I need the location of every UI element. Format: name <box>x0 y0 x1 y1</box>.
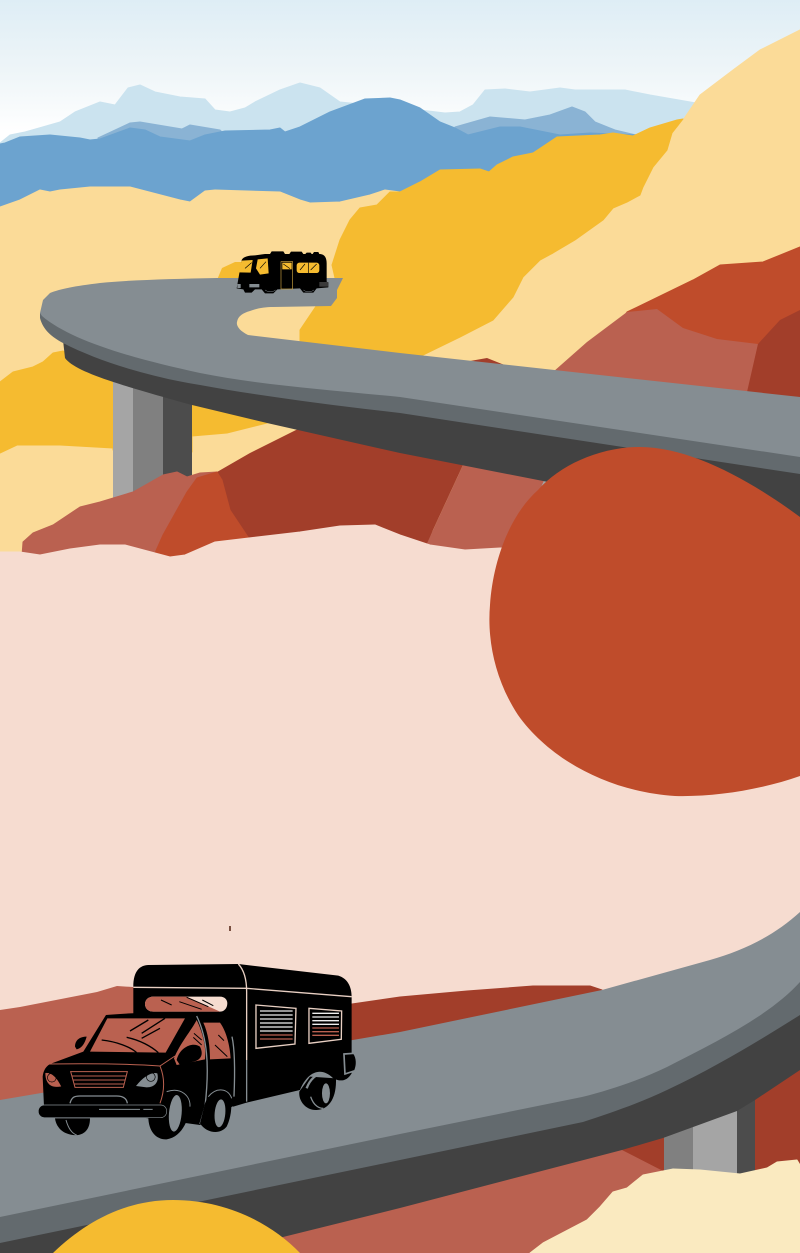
red hills middle: clay right <box>425 465 545 560</box>
sky <box>0 0 800 220</box>
large van: rear cab window <box>203 1023 231 1059</box>
large van: door window <box>174 1020 205 1065</box>
large van: skylight clay <box>145 997 220 1012</box>
large van: front left wheel <box>55 1118 90 1135</box>
far mountains <box>0 83 696 180</box>
large van: bumper <box>38 1105 167 1118</box>
brown hill <box>747 310 800 400</box>
small van: door window <box>256 258 269 275</box>
red blob <box>489 447 800 796</box>
large van: cab <box>43 1012 235 1125</box>
distant red ridge <box>470 358 507 366</box>
road: underside <box>63 340 800 532</box>
small van: wheels <box>265 290 314 292</box>
lower road: underside <box>0 1010 800 1253</box>
large van: mirror <box>177 1045 202 1065</box>
small van: roof vents <box>270 251 319 254</box>
lower pillar group <box>664 1090 755 1180</box>
speck <box>229 926 231 931</box>
large van: front left wheel line <box>66 1120 77 1135</box>
large van: cab outline rear <box>232 1037 235 1097</box>
right pillar fragment <box>538 475 552 500</box>
yellow hill left <box>0 351 280 453</box>
large van: side window 2 <box>309 1008 342 1043</box>
lower road <box>0 912 800 1253</box>
yellow patch behind small van <box>217 262 250 285</box>
sand hills <box>0 30 800 560</box>
large van: front right wheel <box>148 1090 190 1139</box>
upper road <box>40 278 800 532</box>
red hill upper right <box>600 247 800 400</box>
large van: box trim lines <box>133 964 352 1060</box>
small camper van <box>237 251 328 293</box>
large van: skylight glints <box>161 997 213 1009</box>
lower clay hill <box>0 986 340 1110</box>
road: side <box>40 313 800 474</box>
small van: window glints <box>245 262 317 273</box>
large van: camper box <box>133 964 352 1107</box>
large van: door lines <box>197 1016 207 1124</box>
large van: window glints 2 <box>193 1033 227 1057</box>
large van: plate recess <box>70 1096 127 1103</box>
large van: windshield glints <box>102 1018 165 1053</box>
lower brown hill <box>345 986 602 1060</box>
large van: headlight circles <box>47 1073 155 1082</box>
small van: body <box>237 254 328 293</box>
blue mountains <box>0 98 640 230</box>
large van: rear wheel <box>299 1072 341 1110</box>
upper pillar <box>113 375 192 510</box>
cream hill <box>530 1160 800 1253</box>
large van: bumper highlights <box>99 1108 153 1111</box>
large van: roof skylight <box>145 997 227 1012</box>
small van: grille and lights <box>237 284 259 288</box>
red hills middle: brown <box>205 428 463 548</box>
yellow hill <box>300 119 683 360</box>
large van: rear light <box>344 1053 357 1074</box>
large van: trim lower <box>245 1060 249 1102</box>
small van: windshield <box>238 260 253 273</box>
small van: door glass <box>282 263 292 269</box>
large van: hood line <box>48 1056 175 1103</box>
small van: side windows <box>297 263 319 273</box>
large van: side mirror <box>75 1037 87 1049</box>
large van: grille <box>71 1072 127 1087</box>
red hills middle: clay left <box>22 472 217 560</box>
large van: windshield <box>90 1018 185 1053</box>
mid mountains <box>98 107 640 170</box>
road: surface <box>40 278 800 457</box>
yellow hill bottom <box>53 1200 300 1253</box>
small van: bumper <box>319 282 328 287</box>
large van: headlight right <box>136 1073 158 1087</box>
pink panel <box>0 525 800 1030</box>
large camper van <box>38 964 357 1139</box>
large van: headlight left <box>45 1073 62 1087</box>
large van: side window 1 <box>256 1005 296 1048</box>
bottom clay ground <box>205 1145 663 1253</box>
small van: door <box>281 262 293 289</box>
bottom brown ground <box>590 1060 800 1180</box>
clay hill <box>553 309 758 395</box>
lower road: side <box>0 975 800 1243</box>
large van: rear cab wheel <box>200 1090 232 1132</box>
red hills middle: orange <box>155 472 250 560</box>
lower road: surface <box>0 912 800 1217</box>
